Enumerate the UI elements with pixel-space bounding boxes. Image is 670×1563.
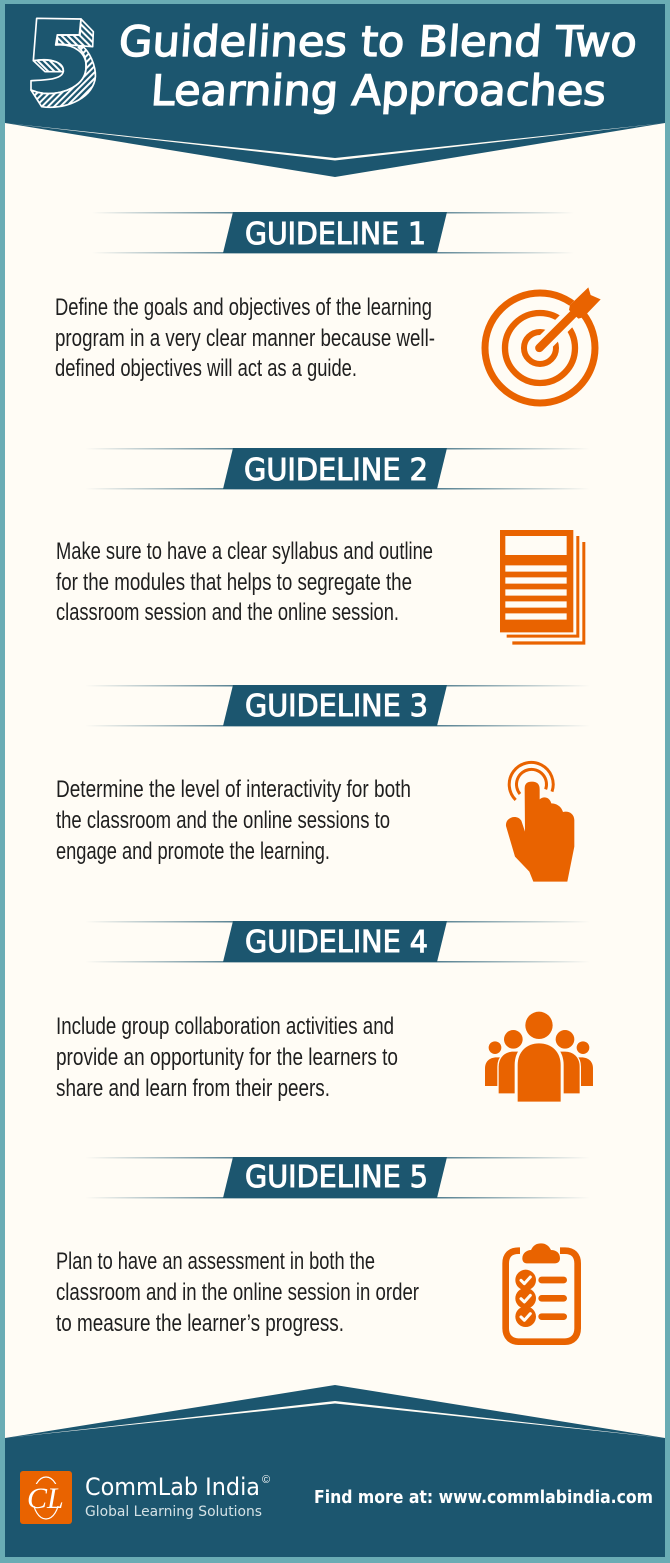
text: guideline 2: Make sure to have a clear syllabus and outline	[56, 538, 433, 565]
title	[117, 17, 639, 115]
text: guideline 4: Include group collaboration activities and	[56, 1013, 394, 1040]
text: guideline 3: Determine the level of interactivity for both	[56, 776, 411, 803]
text: guideline 1	[55, 294, 435, 382]
icon: hatched number 5	[31, 18, 95, 107]
logo: CommLab India	[20, 1471, 270, 1524]
text: guideline 4	[56, 1013, 398, 1102]
icon: group of people	[485, 1012, 593, 1102]
section: guideline 3	[56, 685, 590, 882]
logo: CommLab India: CL	[27, 1482, 64, 1515]
heading: guideline 4: GUIDELINE 4	[245, 925, 428, 960]
text: guideline 3: engage and promote the learning.	[56, 838, 330, 865]
text: guideline 2: classroom session and the online session.	[56, 599, 399, 626]
icon: pointing hand with touch ripples	[506, 762, 574, 882]
text: guideline 5: classroom and in the online session in order	[56, 1279, 419, 1306]
logo: CommLab India: CommLab India	[85, 1473, 260, 1501]
heading: guideline 3: GUIDELINE 3	[245, 689, 428, 724]
header banner	[5, 4, 665, 177]
text: guideline 5: to measure the learner’s progress.	[56, 1310, 344, 1337]
text: guideline 5: Plan to have an assessment in both the	[56, 1248, 375, 1275]
title: Guidelines to Blend Two	[117, 17, 639, 66]
section: guideline 4	[56, 921, 593, 1102]
heading: guideline 2: GUIDELINE 2	[244, 453, 428, 488]
text: guideline 1: Define the goals and objectives of the learning	[55, 294, 432, 321]
text: guideline 4: share and learn from their peers.	[56, 1075, 330, 1102]
text: guideline 4: provide an opportunity for the learners to	[56, 1044, 398, 1071]
heading: guideline 1: GUIDELINE 1	[245, 217, 426, 252]
text: guideline 1: defined objectives will act as a guide.	[55, 355, 357, 382]
section: guideline 2	[56, 448, 590, 645]
text: guideline 2	[56, 538, 433, 626]
text: guideline 3: the classroom and the online sessions to	[56, 807, 390, 834]
section: guideline 5	[56, 1157, 590, 1342]
text: guideline 1: program in a very clear manner because well-	[55, 325, 435, 352]
title: Learning Approaches	[149, 66, 608, 115]
icon: target with arrow	[485, 287, 601, 403]
icon: clipboard checklist	[506, 1243, 578, 1342]
logo: CommLab India: ©	[262, 1474, 270, 1486]
section: guideline 1	[55, 212, 601, 403]
icon: stacked document pages	[500, 530, 585, 645]
footer banner	[5, 1385, 665, 1557]
logo: CommLab India: Global Learning Solutions	[85, 1504, 262, 1520]
heading: guideline 5: GUIDELINE 5	[245, 1160, 428, 1195]
text: guideline 3	[56, 776, 411, 865]
text: guideline 2: for the modules that helps to segregate the	[56, 569, 412, 596]
text: guideline 5	[56, 1248, 419, 1337]
